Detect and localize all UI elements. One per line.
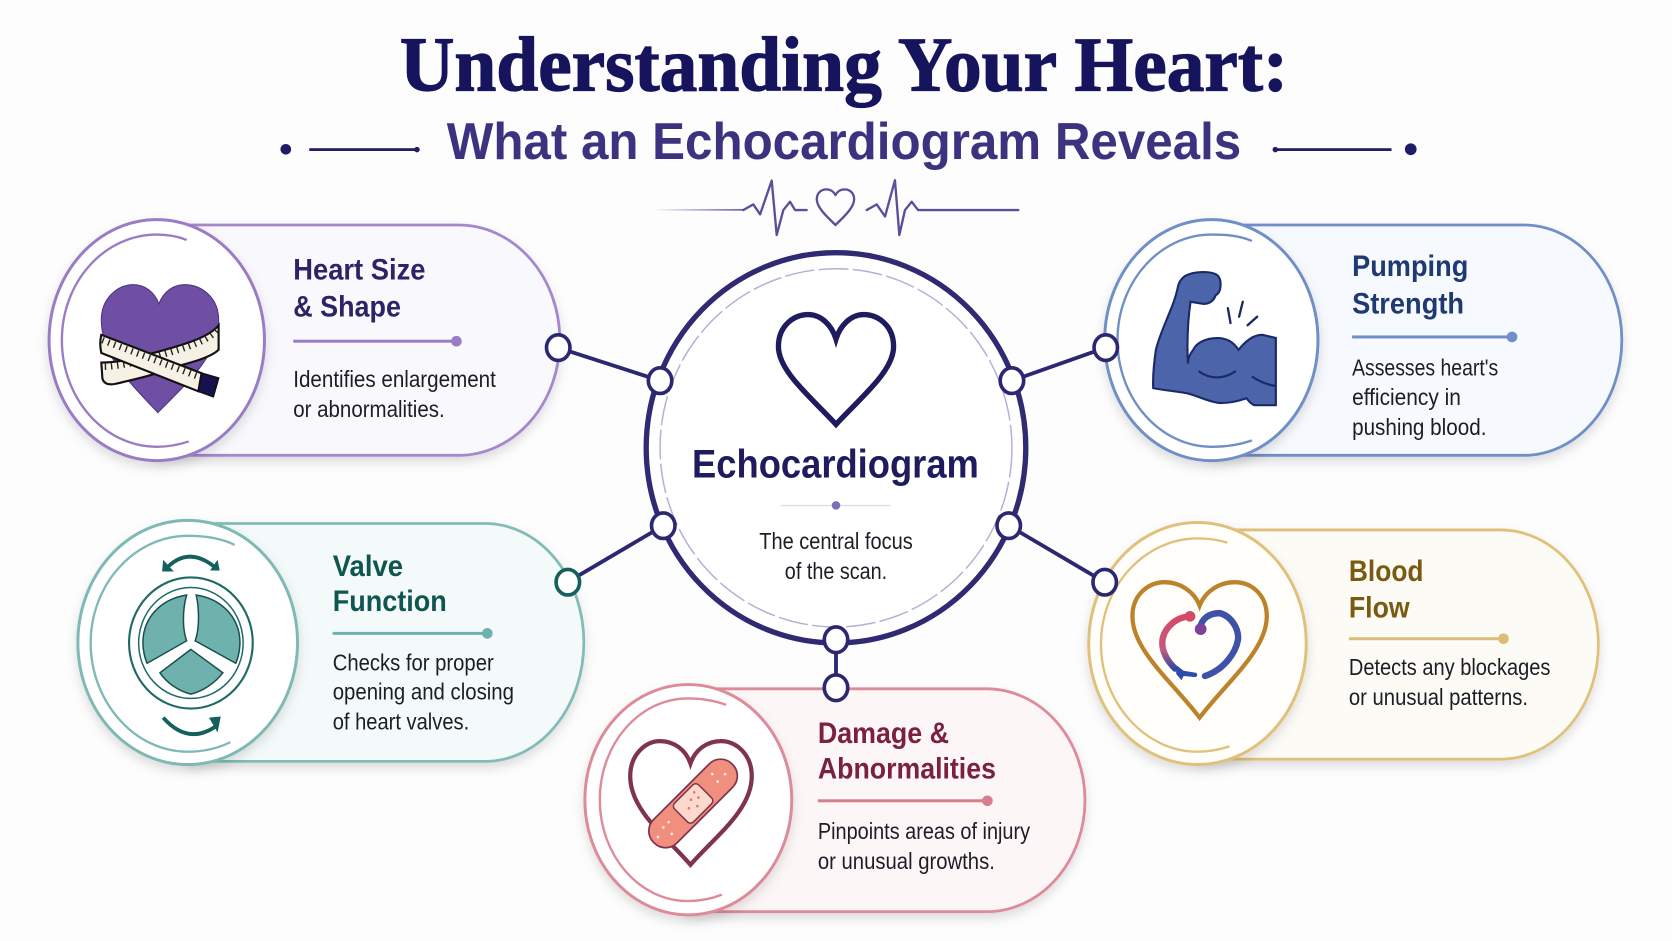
- icon: heart valve: [129, 557, 253, 734]
- description: Detects any blockages: [1349, 654, 1550, 680]
- description: Assesses heart's: [1352, 354, 1498, 380]
- circle badge: [78, 520, 298, 765]
- dashed inner ring: [660, 269, 1012, 627]
- heartbeat divider: [653, 180, 1018, 235]
- title: Understanding Your Heart:: [400, 22, 1288, 108]
- circle badge: [585, 685, 792, 915]
- circle badge: [1105, 220, 1318, 461]
- heading: Pumping: [1352, 250, 1468, 283]
- description: efficiency in: [1352, 384, 1461, 410]
- panel: damage and abnormalities: [585, 685, 1085, 915]
- description: of heart valves.: [333, 708, 469, 734]
- divider: [818, 795, 993, 806]
- panel: pumping strength: [1105, 220, 1622, 461]
- pill: [1211, 225, 1622, 455]
- heading: [333, 550, 447, 618]
- heading: Flow: [1349, 591, 1410, 624]
- heading: [1349, 555, 1424, 624]
- icon: heart with circulation arrows: [1132, 582, 1267, 718]
- pill: [157, 225, 560, 455]
- description: Identifies enlargement: [293, 366, 496, 392]
- heading: Function: [333, 585, 447, 618]
- panel: heart size and shape: [49, 220, 560, 461]
- pill: [688, 689, 1085, 912]
- heading: Heart Size: [293, 253, 425, 286]
- heading: [818, 717, 996, 785]
- panel: blood flow: [1089, 522, 1598, 765]
- description: or abnormalities.: [293, 396, 445, 422]
- icon: heart with bandage: [630, 741, 752, 865]
- divider: [1349, 633, 1509, 644]
- icon: heart with measuring tape: [100, 285, 219, 413]
- right title ornament: [1273, 143, 1417, 155]
- left title ornament: [280, 144, 420, 155]
- description: or unusual patterns.: [1349, 684, 1528, 710]
- description: The central focus: [759, 528, 913, 554]
- heading: Strength: [1352, 287, 1464, 320]
- circle badge: [49, 220, 264, 461]
- heading: Damage &: [818, 717, 949, 750]
- description: [293, 366, 496, 422]
- connector lines: [558, 348, 1106, 688]
- description: [333, 650, 514, 734]
- heading: Echocardiogram: [692, 443, 979, 487]
- connector nodes: [547, 335, 1118, 701]
- outer ring: [646, 253, 1026, 643]
- heading: Valve: [333, 550, 403, 583]
- divider: [333, 628, 493, 639]
- heading: & Shape: [293, 291, 401, 324]
- description: [818, 818, 1031, 874]
- description: [1349, 654, 1550, 710]
- description: [759, 528, 913, 584]
- description: pushing blood.: [1352, 414, 1486, 440]
- panel: valve function: [78, 520, 584, 765]
- central circle: [646, 253, 1026, 643]
- pill: [1197, 530, 1598, 759]
- heading: Blood: [1349, 555, 1424, 588]
- description: opening and closing: [333, 678, 514, 704]
- heading: [1352, 250, 1468, 320]
- divider: [293, 336, 462, 347]
- divider: [1352, 332, 1517, 342]
- icon: heart outline: [778, 315, 894, 424]
- divider: [781, 501, 890, 510]
- heading: [293, 253, 425, 324]
- description: Pinpoints areas of injury: [818, 818, 1031, 844]
- description: [1352, 354, 1498, 440]
- heading: Abnormalities: [818, 752, 996, 785]
- circle badge: [1089, 522, 1306, 765]
- description: Checks for proper: [333, 650, 494, 676]
- pill: [188, 524, 584, 761]
- description: of the scan.: [785, 558, 887, 584]
- subtitle: What an Echocardiogram Reveals: [447, 113, 1241, 171]
- description: or unusual growths.: [818, 848, 995, 874]
- icon: flexed arm: [1153, 272, 1276, 405]
